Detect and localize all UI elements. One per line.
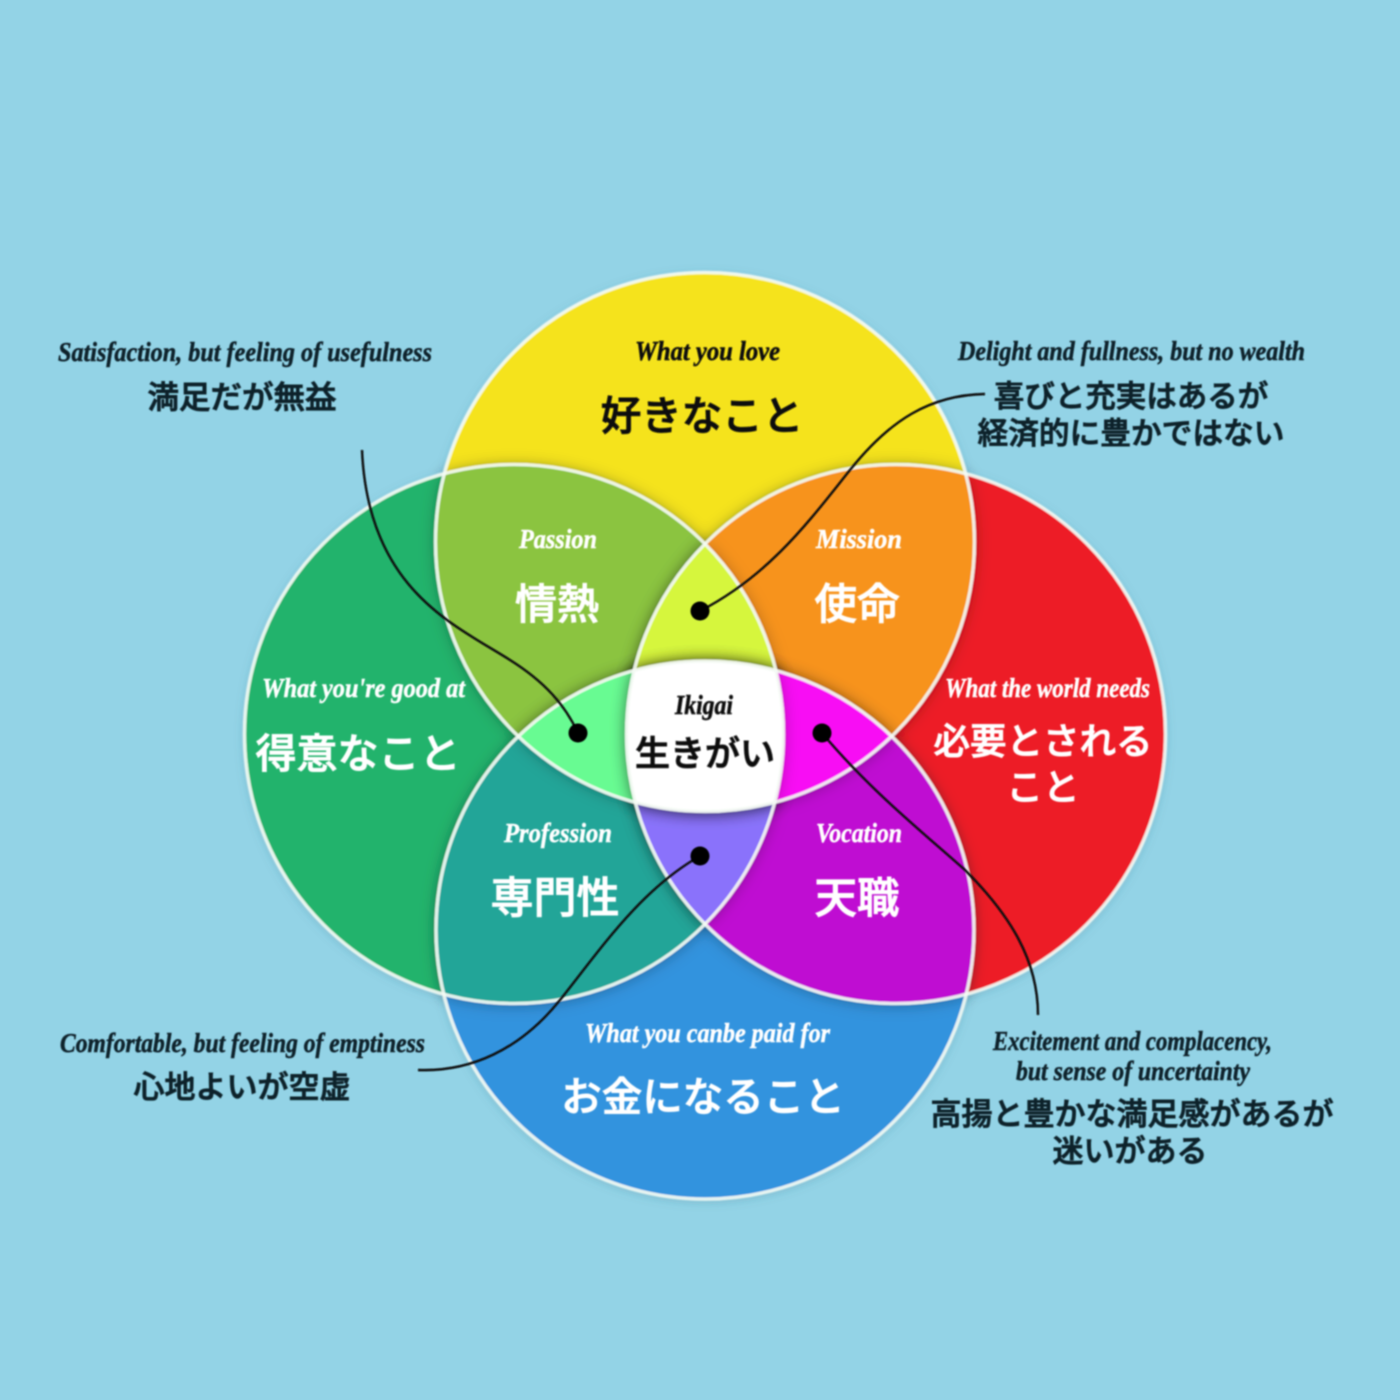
label: what you can be paid for [561, 1018, 845, 1120]
callout: satisfaction: Satisfaction, but feeling of usefulness [58, 337, 432, 367]
callout: comfortable [60, 1028, 425, 1105]
callout: excitement: 高揚と豊かな満足感があるが [930, 1097, 1334, 1132]
label: mission [814, 524, 902, 629]
circle: what the world needs [626, 464, 1166, 1004]
callout: delight: 喜びと充実はあるが [994, 380, 1268, 414]
callout: delight [957, 336, 1305, 451]
label: ikigai: 生きがい [635, 735, 775, 774]
lens: bottom [629, 653, 784, 927]
label: what you're good at: 得意なこと [256, 731, 460, 777]
label: passion: Passion [518, 524, 597, 554]
label: ikigai [635, 690, 775, 774]
circle outlines [244, 272, 1166, 1199]
label: passion: 情熱 [515, 581, 599, 628]
label: profession [490, 818, 620, 923]
callouts [58, 336, 1334, 1169]
label: profession: 専門性 [490, 875, 620, 923]
label: what you love [601, 336, 803, 439]
callout: excitement: Excitement and complacency, [992, 1026, 1272, 1056]
label: mission: 使命 [814, 582, 900, 629]
label: what the world needs: 必要とされる [934, 721, 1152, 762]
callout: satisfaction: 満足だが無益 [147, 379, 337, 415]
callout: comfortable: Comfortable, but feeling of emptiness [60, 1028, 425, 1058]
callout: satisfaction [58, 337, 432, 415]
connector: delight [690, 394, 985, 620]
connector: satisfaction [362, 450, 588, 742]
center: ikigai [617, 653, 793, 822]
overlap: mission [628, 456, 984, 741]
callout: excitement: but sense of uncertainty [1016, 1056, 1251, 1086]
label: what you can be paid for: What you canbe paid for [585, 1018, 830, 1048]
overlap: vocation [629, 663, 983, 1014]
circle: what you're good at [244, 464, 784, 1004]
connector: comfortable [418, 846, 710, 1070]
connector: excitement [812, 724, 1038, 1015]
circle and overlap labels [256, 336, 1152, 1120]
label: what you love: What you love [635, 336, 780, 366]
label: vocation [814, 818, 902, 923]
callout: comfortable: 心地よいが空虚 [134, 1070, 350, 1105]
lens: left [516, 653, 778, 822]
callout: excitement [930, 1026, 1334, 1169]
label: what you're good at: What you're good at [262, 673, 466, 703]
label: vocation: Vocation [816, 818, 902, 848]
label: what you can be paid for: お金になること [561, 1074, 845, 1120]
venn diagram [244, 272, 1166, 1199]
overlap: profession [428, 666, 710, 1014]
callout: delight: 経済的に豊かではない [978, 416, 1284, 451]
label: mission: Mission [815, 524, 902, 554]
callout: delight: Delight and fullness, but no wealth [957, 336, 1305, 366]
connector lines and dots [362, 394, 1038, 1070]
lens: right [617, 653, 894, 822]
label: ikigai: Ikigai [674, 690, 733, 720]
label: what the world needs: こと [1006, 767, 1080, 808]
label: vocation: 天職 [814, 876, 900, 923]
callout: excitement: 迷いがある [1052, 1134, 1208, 1169]
overlap: passion [428, 456, 708, 740]
label: passion [515, 524, 599, 628]
circle: what you can be paid for [436, 661, 974, 1199]
label: what you love: 好きなこと [601, 393, 803, 439]
label: what the world needs: What the world needs [945, 673, 1150, 703]
label: what you're good at [256, 673, 466, 777]
label: profession: Profession [503, 818, 612, 848]
label: what the world needs [934, 673, 1152, 808]
circle: what you love [436, 272, 974, 812]
lens: top [628, 542, 784, 806]
